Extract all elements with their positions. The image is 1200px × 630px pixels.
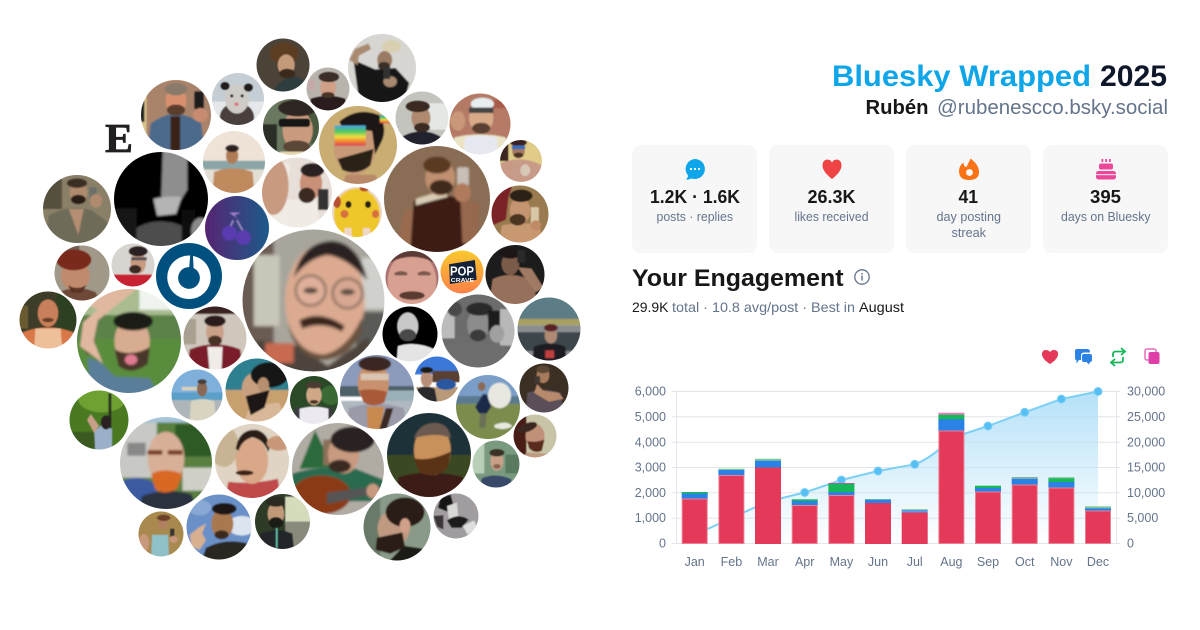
avatar: cap selfie <box>348 34 416 102</box>
left axis labels: 2,000 <box>635 486 666 500</box>
avatar: boat harbour <box>172 370 222 420</box>
stat label: likes received <box>794 209 868 224</box>
avatar: black and white sketch <box>434 494 478 538</box>
month labels: Jul <box>907 555 923 569</box>
avatar: Pop Crave logo: CRAVE <box>451 278 474 284</box>
avatar: red hair selfie <box>54 246 110 300</box>
avatar: E logo: E <box>105 115 133 161</box>
bar: Mar <box>755 459 781 544</box>
stat label: streak <box>952 225 986 240</box>
stat label: day posting <box>936 209 1001 224</box>
right axis labels: 10,000 <box>1127 486 1165 500</box>
avatar: car and blue sky <box>414 356 460 402</box>
left axis labels: 3,000 <box>635 460 666 474</box>
avatar: white cap brick wall <box>450 94 510 154</box>
icon: chat bubble <box>686 159 705 180</box>
line points <box>801 388 1102 496</box>
stat label: days on Bluesky <box>1061 209 1151 224</box>
stat value: 395 <box>1090 186 1121 207</box>
avatar: mustache hand on head <box>215 424 289 498</box>
avatar: mohawk beard <box>514 414 556 458</box>
right axis labels <box>1127 384 1165 550</box>
avatar: Pikachu <box>332 187 382 237</box>
icon: info <box>855 270 869 284</box>
avatar: orange tank selfie <box>20 292 76 348</box>
right axis labels: 5,000 <box>1127 511 1158 525</box>
avatar: stadium crowd <box>518 298 580 360</box>
avatar: tan background blue tank <box>138 512 184 556</box>
heading: your engagement: Your Engagement <box>632 265 844 292</box>
avatar: sunglasses man <box>263 99 319 155</box>
month labels: Jun <box>868 555 888 569</box>
avatar: man with dark jacket by window <box>396 92 448 144</box>
right axis labels: 25,000 <box>1127 410 1165 424</box>
avatar: teal background beard profile <box>226 358 288 422</box>
bar: Jun <box>865 499 891 544</box>
cumulative line <box>695 392 1098 535</box>
avatar: green shirt selfie <box>43 175 111 243</box>
stat value: 41 <box>958 186 978 207</box>
bar: Apr <box>792 499 818 544</box>
month labels: Apr <box>795 555 814 569</box>
avatar: shirtless dark mirror selfie <box>486 245 544 304</box>
month labels: Nov <box>1050 555 1073 569</box>
avatar: Pop Crave logo: POP <box>450 263 474 278</box>
month labels <box>685 555 1109 569</box>
month labels: Aug <box>940 555 963 569</box>
icon: likes heart <box>1042 350 1058 364</box>
engagement summary: total · 10.8 avg/post · Best in <box>672 299 855 315</box>
stat value: 1.2K · 1.6K <box>650 186 741 207</box>
left axis labels: 6,000 <box>635 384 666 398</box>
engagement summary: August <box>859 299 904 315</box>
avatar: black and white bald man <box>382 306 438 362</box>
left axis labels: 0 <box>659 536 666 550</box>
avatar: black and white portrait <box>114 152 208 246</box>
avatar: red shirt glasses <box>112 244 154 286</box>
bar: Aug <box>938 413 964 544</box>
bar: Feb <box>718 469 744 544</box>
avatar: Pop Crave logo <box>440 250 484 294</box>
panel: day posting streak <box>906 145 1031 253</box>
avatar: curly hair man <box>256 38 310 92</box>
right axis labels: 30,000 <box>1127 384 1165 398</box>
icon: birthday cake <box>1096 159 1116 180</box>
chart: monthly engagement <box>635 384 1165 569</box>
panel: days on Bluesky <box>1043 145 1168 253</box>
engagement summary: 29.9K <box>632 299 669 315</box>
avatar: guitar and christmas tree <box>292 423 384 515</box>
avatar: brown mirror selfie <box>520 364 568 412</box>
avatar: tongue out, peace sign in park <box>77 289 181 393</box>
avatar: closeup face <box>386 251 438 304</box>
panel: posts and replies <box>632 145 757 253</box>
left axis labels: 1,000 <box>635 511 666 525</box>
month labels: Feb <box>721 555 742 569</box>
avatar: red wall selfie <box>492 186 548 242</box>
title: Bluesky Wrapped <box>832 60 1091 93</box>
chart legend <box>1042 348 1160 366</box>
panel: likes received <box>769 145 894 253</box>
avatar: black and white mirror selfie <box>442 294 514 368</box>
avatar: large portrait with round glasses <box>242 230 384 372</box>
stat label <box>936 209 1001 240</box>
avatar: flower illustration coast <box>456 375 520 439</box>
avatar: shirtless sunglasses on bed <box>500 140 542 182</box>
avatar: green wall portrait <box>472 440 520 488</box>
bar: Oct <box>1012 477 1038 544</box>
left axis labels <box>635 384 666 550</box>
title: 2025 <box>1100 60 1167 93</box>
avatar: white shirt in greenery <box>290 376 338 424</box>
avatar: red blazer <box>184 306 246 370</box>
icon: repost arrows <box>1111 348 1125 366</box>
right axis labels: 20,000 <box>1127 436 1165 450</box>
month labels: Jan <box>685 555 705 569</box>
right axis labels: 15,000 <box>1127 460 1165 474</box>
avatar: small selfie dark jacket <box>306 68 350 110</box>
icon: replies bubbles <box>1075 349 1092 364</box>
avatar: forest photographer <box>70 390 128 450</box>
grid lines and axes <box>672 392 1120 544</box>
avatar: rainbow light on face <box>319 106 397 184</box>
month labels: Oct <box>1015 555 1035 569</box>
month labels: Mar <box>757 555 779 569</box>
icon: flame <box>959 158 979 180</box>
bar: Nov <box>1048 477 1074 544</box>
engagement summary <box>632 299 904 315</box>
bar: May <box>828 483 854 544</box>
stat label: posts · replies <box>656 209 733 224</box>
stat value: 26.3K <box>808 186 856 207</box>
month labels: Dec <box>1087 555 1109 569</box>
avatar: bald with orange beard <box>120 417 212 509</box>
bar: Jan <box>682 492 708 544</box>
avatar: opossum <box>212 73 264 125</box>
avatar: glasses and straps at sunset <box>340 355 414 429</box>
avatar: profile painting <box>364 494 430 560</box>
right axis labels: 0 <box>1127 536 1134 550</box>
profile name and handle: @rubenescco.bsky.social <box>937 97 1168 119</box>
avatar: beach shirtless <box>203 131 265 193</box>
avatar cluster <box>14 27 587 567</box>
left axis labels: 5,000 <box>635 410 666 424</box>
profile name and handle: Rubén <box>866 97 928 119</box>
left axis labels: 4,000 <box>635 436 666 450</box>
avatar: E logo <box>95 114 143 162</box>
cumulative area <box>695 392 1098 544</box>
month labels: May <box>830 555 854 569</box>
avatar: lanyard at train tracks <box>255 494 310 549</box>
month labels: Sep <box>977 555 999 569</box>
avatar: tank top arm raised <box>262 158 332 228</box>
bar: Jul <box>902 509 928 544</box>
avatar: sky peace sign hoodie <box>186 494 252 560</box>
avatar: cherries logo <box>205 196 269 260</box>
icon: heart <box>822 160 842 179</box>
avatar: dark beard at dusk <box>387 413 471 497</box>
avatar: blue circular logo <box>156 243 222 309</box>
avatar: maroon tee mirror selfie <box>384 146 490 252</box>
bar: Dec <box>1085 506 1111 544</box>
bar: Sep <box>975 486 1001 544</box>
avatar: denim jacket selfie <box>141 80 211 150</box>
icon: quote copies <box>1145 349 1160 364</box>
